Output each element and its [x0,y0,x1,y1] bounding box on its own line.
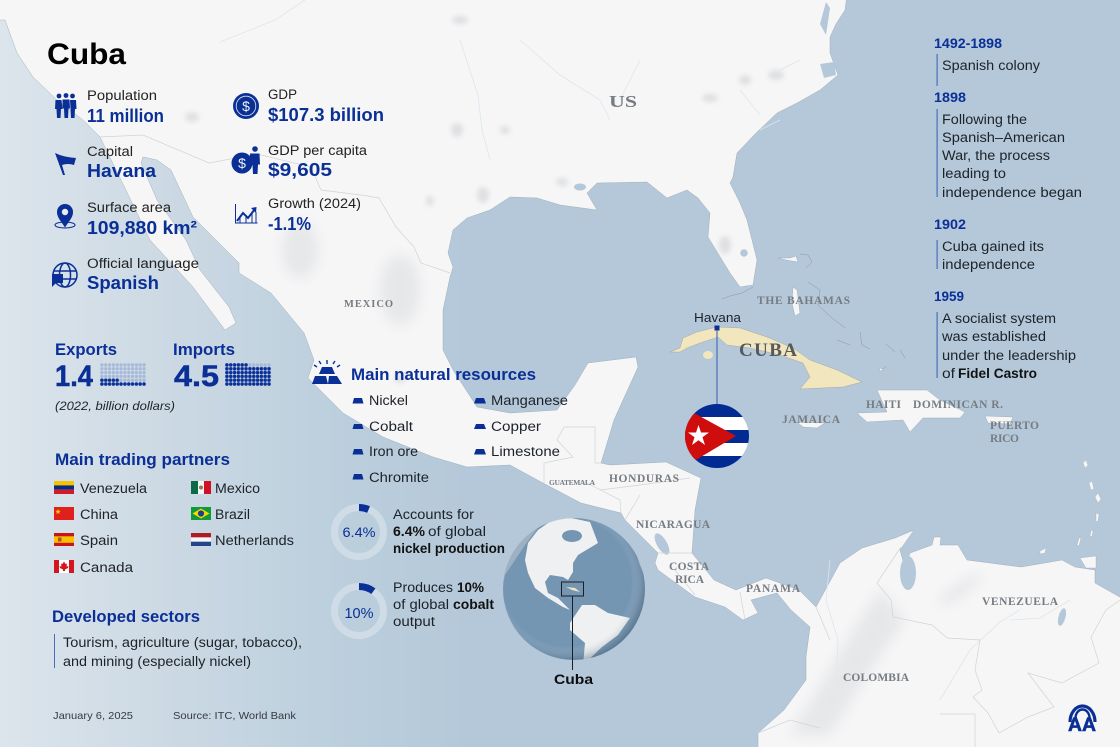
flag: Spain [54,533,74,546]
map labels: country names: RICO [990,433,1019,445]
timeline: 1898: 1898 [934,90,967,105]
panel: main trading partners [54,450,294,575]
text: cobalt share: of global [393,597,449,612]
dot chart: imports [225,363,271,386]
icon: ingot [352,424,364,429]
stat: GDP per capita [232,143,368,180]
Havana marker and leader line [694,310,742,405]
stat: growth: Growth (2024) [268,196,361,211]
panel: main trading partners: Spain [80,533,118,548]
flag: Venezuela [54,481,74,494]
map labels: country names: NICARAGUA [636,519,711,531]
text: cobalt share: 10% [457,580,484,595]
panel: main natural resources: Nickel [369,393,408,408]
footer: date and source: January 6, 2025 [53,710,133,722]
highlighted country: Cuba [670,327,862,389]
timeline: 1898: independence began [942,185,1082,200]
flag: Canada [54,560,74,573]
map labels: country names: JAMAICA [782,414,841,426]
timeline: 1898: Spanish–American [942,130,1065,145]
donut chart: nickel 6.4% [334,508,384,556]
timeline: 1902: independence [942,257,1035,272]
panel: main trading partners: Mexico [215,481,260,496]
donut chart: cobalt 10%: 10% [344,605,374,622]
stat: surface area [55,200,197,238]
timeline: 1959: of [942,366,955,381]
stat: growth: -1.1% [268,213,311,234]
stat: official language [52,256,199,293]
stat: surface area: 109,880 km² [87,217,197,238]
panel: main trading partners: China [80,507,119,522]
icon: ingot [474,424,486,429]
panel: main trading partners: Brazil [215,507,250,522]
text: cobalt share: cobalt [453,597,495,612]
map labels: country names: RICA [675,574,705,586]
stat: capital: Capital [87,144,133,159]
panel: main trading partners: Netherlands [215,533,294,548]
timeline: 1898: Following the [942,112,1027,127]
Cuban flag circle [685,404,749,468]
stat: GDP per capita: GDP per capita [268,143,368,158]
panel: main natural resources: Limestone [491,444,560,459]
map labels: country names [344,92,1059,684]
exports imports note: (2022, billion dollars) [55,399,175,413]
imports: Imports [173,340,235,359]
text: cobalt share: output [393,614,435,629]
Havana marker and leader line: Havana [694,310,742,325]
icon: coin and person: $ [238,155,246,171]
stat: GDP: GDP [268,87,297,102]
icon: flag [55,153,76,175]
panel: main trading partners: Venezuela [80,481,148,496]
stat: official language: Spanish [87,272,159,293]
globe label: Cuba [554,671,593,687]
icon: line chart [236,204,258,223]
map labels: country names: DOMINICAN R. [913,399,1003,411]
timeline: 1959: under the leadership [942,348,1076,363]
icon: map pin [55,204,75,228]
exports: Exports [55,340,117,359]
stat: capital [55,144,157,181]
map labels: country names: US [609,92,637,111]
icon: globe with speech bubble [52,263,77,287]
panel: main natural resources: Cobalt [369,419,413,434]
map: country borders [100,135,1120,747]
exports [55,340,146,393]
map labels: country names: GUATEMALA [549,478,596,487]
timeline: 1959: was established [941,329,1046,344]
timeline: 1959: 1959 [934,289,964,304]
map labels: country names: VENEZUELA [982,596,1059,608]
timeline: 1902: Cuba gained its [942,239,1044,254]
stat: surface area: Surface area [87,200,172,215]
stat: GDP: $107.3 billion [268,104,384,125]
panel: developed sectors: Tourism, agriculture (sugar, tobacco), [63,635,302,650]
panel: main trading partners: Main trading partners [55,450,230,469]
donut chart: nickel 6.4%: 6.4% [342,525,376,540]
map labels: country names: COSTA [669,561,710,573]
footer: date and source [53,710,297,722]
flag: Brazil [191,507,211,520]
map labels: country names: PANAMA [746,583,801,595]
stat: population [55,88,164,126]
logo: AA: AA [1068,715,1096,736]
panel: main natural resources: Iron ore [369,444,418,459]
text: nickel share: nickel production [393,541,505,556]
timeline: 1959 [934,289,1076,381]
dot chart: exports [100,363,146,386]
stat: GDP per capita: $9,605 [268,159,332,180]
leader line [572,596,574,670]
timeline: 1492-1898: 1492-1898 [934,36,1003,51]
panel: main trading partners: Canada [80,560,134,575]
map labels: country names: THE BAHAMAS [757,295,850,307]
timeline: 1492-1898 [934,36,1040,86]
timeline: 1902: 1902 [934,217,966,232]
stat: population: 11 million [87,105,164,126]
icon: ingot [352,398,364,404]
map labels: country names: PUERTO [990,420,1039,432]
footer: date and source: Source: ITC, World Bank [173,710,297,722]
panel: main natural resources: Manganese [491,393,568,408]
timeline: 1898: leading to [942,166,1006,181]
timeline: 1492-1898: Spanish colony [942,58,1040,73]
text: cobalt share: Produces [393,580,453,595]
icon: people [55,93,76,118]
icon: ingot [352,449,364,454]
flag: Netherlands [191,533,211,546]
timeline: 1898: War, the process [942,148,1050,163]
icon: dollar coin: $ [242,98,250,114]
stat: population: Population [87,88,157,103]
timeline: 1898 [934,90,1082,200]
icon: ingot [352,474,364,480]
text: nickel share: 6.4% [393,524,425,539]
stat: GDP [233,87,384,125]
stat: growth [236,196,361,234]
map: terrain and urban shading [282,222,984,735]
panel: main natural resources: Chromite [369,470,429,485]
timeline: 1959: A socialist system [942,311,1056,326]
icon: dollar coin [233,93,259,119]
stat: capital: Havana [87,160,157,181]
exports: 1.4 [55,360,93,393]
map labels: country names: HONDURAS [609,473,679,485]
panel: developed sectors: and mining (especially nickel) [63,654,251,669]
imports: 4.5 [174,360,219,393]
text: cobalt share [393,580,495,629]
icon: ingot [474,398,486,404]
map labels: country names: CUBA [739,340,797,361]
map labels: country names: MEXICO [344,299,393,310]
stat: official language: Official language [87,256,199,271]
flag: Mexico [191,481,211,494]
panel: developed sectors: Developed sectors [52,607,200,626]
logo: AA [1068,706,1096,736]
icon: ingot [474,449,486,454]
panel: main natural resources: Copper [491,419,542,434]
timeline: 1959: Fidel Castro [958,366,1037,381]
locator globe [502,516,648,687]
donut chart: cobalt 10% [334,586,384,636]
locator box [562,582,584,596]
timeline: 1902 [934,217,1044,272]
panel: developed sectors [52,607,302,669]
panel: main natural resources: Main natural resources [351,365,536,384]
text: nickel share: Accounts for [393,507,475,522]
panel: main natural resources [312,360,568,485]
flag: China [54,507,74,520]
map: lakes and rivers [574,2,1068,627]
imports [173,340,271,393]
text: nickel share [393,507,505,556]
map labels: country names: COLOMBIA [843,672,910,684]
text: nickel share: of global [428,524,486,539]
icon: gold bars [312,360,342,384]
map labels: country names: HAITI [866,399,902,411]
title: Cuba [47,38,126,71]
